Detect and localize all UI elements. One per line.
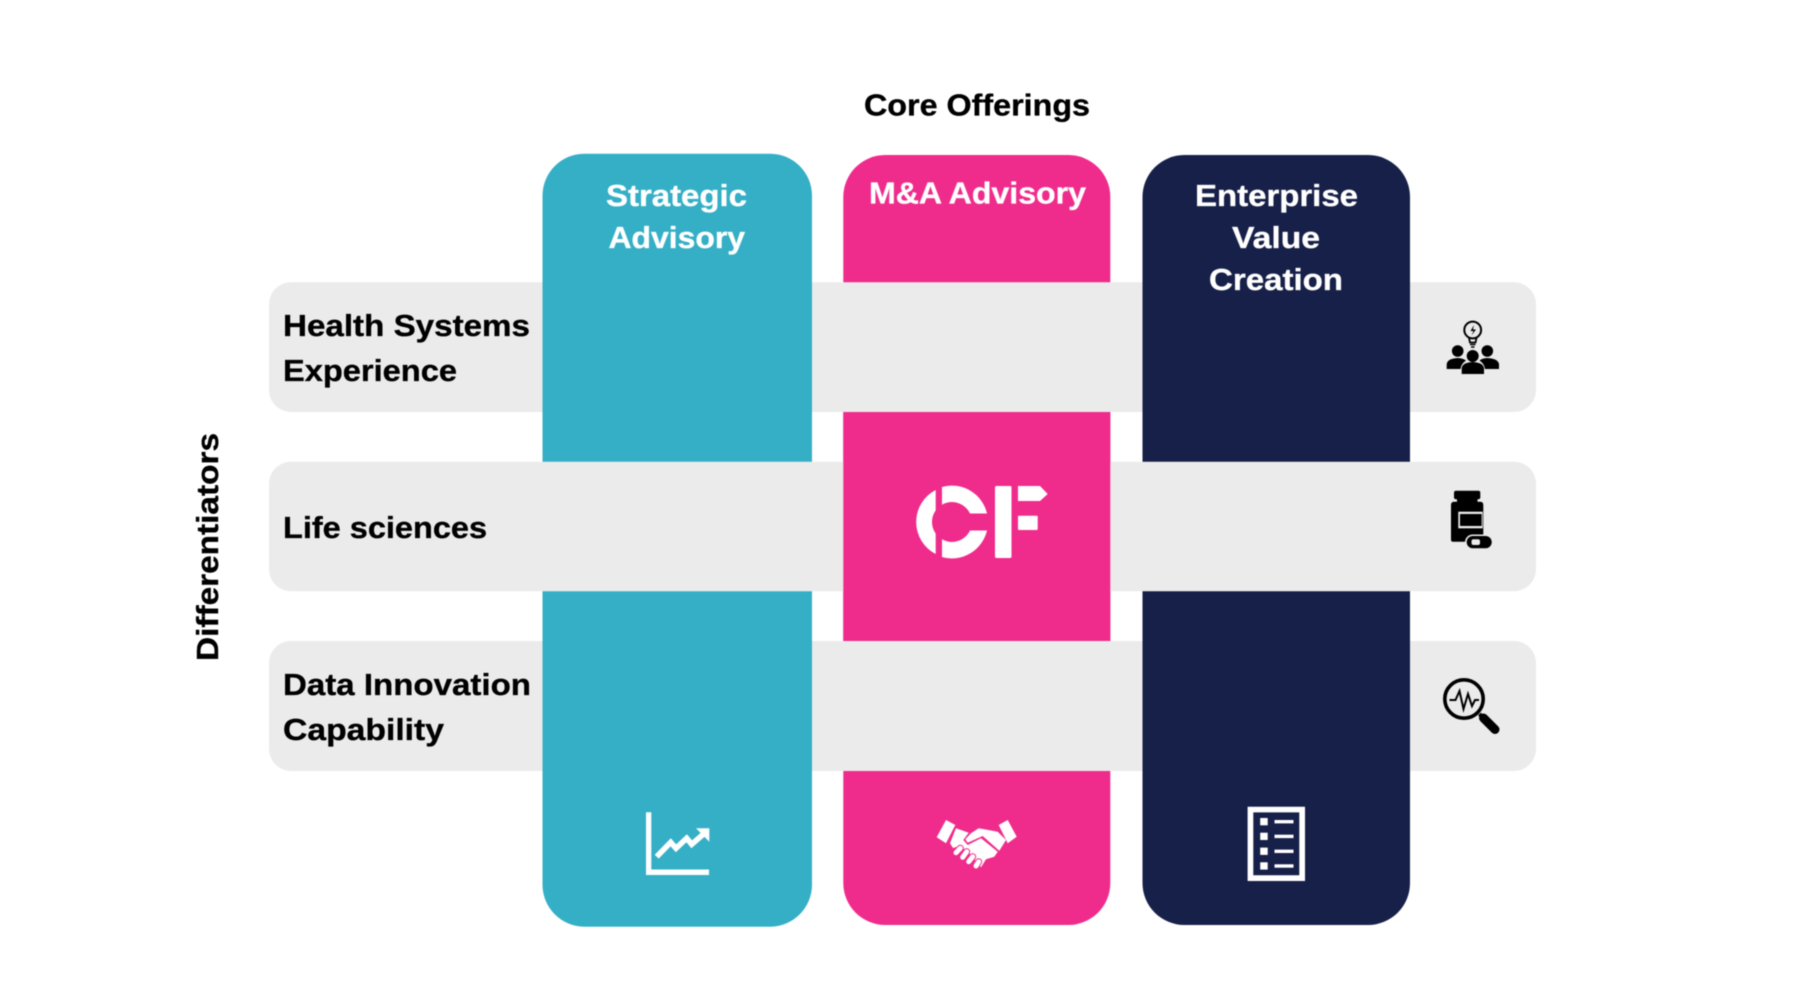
column: M&A Advisory centre block — [843, 412, 1110, 641]
heading: M&A Advisory: M&A Advisory — [869, 176, 1087, 210]
icon: magnifier with pulse — [1445, 680, 1495, 730]
heading: Enterprise Value Creation: Creation — [1209, 262, 1343, 297]
heading: Strategic Advisory: Advisory — [608, 220, 746, 255]
row: Life sciences band — [269, 462, 1536, 591]
row: Data Innovation Capability band — [269, 641, 1536, 771]
label: Data Innovation Capability: Capability — [283, 712, 445, 747]
label: Data Innovation Capability — [283, 667, 531, 747]
logo: CF — [916, 486, 1048, 558]
heading: Enterprise Value Creation — [1195, 178, 1358, 297]
heading: Strategic Advisory — [606, 178, 747, 255]
label: Life sciences: Life sciences — [283, 510, 487, 545]
icon: checklist — [1248, 807, 1305, 881]
icon: rising line chart — [646, 812, 709, 875]
row: Health Systems Experience band — [269, 282, 1536, 412]
icon: people with light bulb — [1447, 322, 1499, 374]
icon: handshake — [937, 820, 1017, 867]
column: Enterprise Value Creation background — [1142, 155, 1410, 925]
column: M&A Advisory background — [843, 155, 1110, 925]
label: Health Systems Experience: Health Systems — [283, 308, 530, 343]
heading: Enterprise Value Creation: Enterprise — [1195, 178, 1358, 213]
column: Strategic Advisory background — [542, 154, 812, 927]
label: Data Innovation Capability: Data Innovation — [283, 667, 531, 702]
label: Health Systems Experience — [283, 308, 530, 388]
icon: pill bottle — [1451, 491, 1493, 550]
title: Core Offerings: Core Offerings — [864, 88, 1090, 122]
heading: Strategic Advisory: Strategic — [606, 178, 747, 213]
heading: Enterprise Value Creation: Value — [1232, 220, 1320, 255]
heading: Differentiators: Differentiators — [190, 433, 225, 661]
label: Health Systems Experience: Experience — [283, 353, 457, 388]
